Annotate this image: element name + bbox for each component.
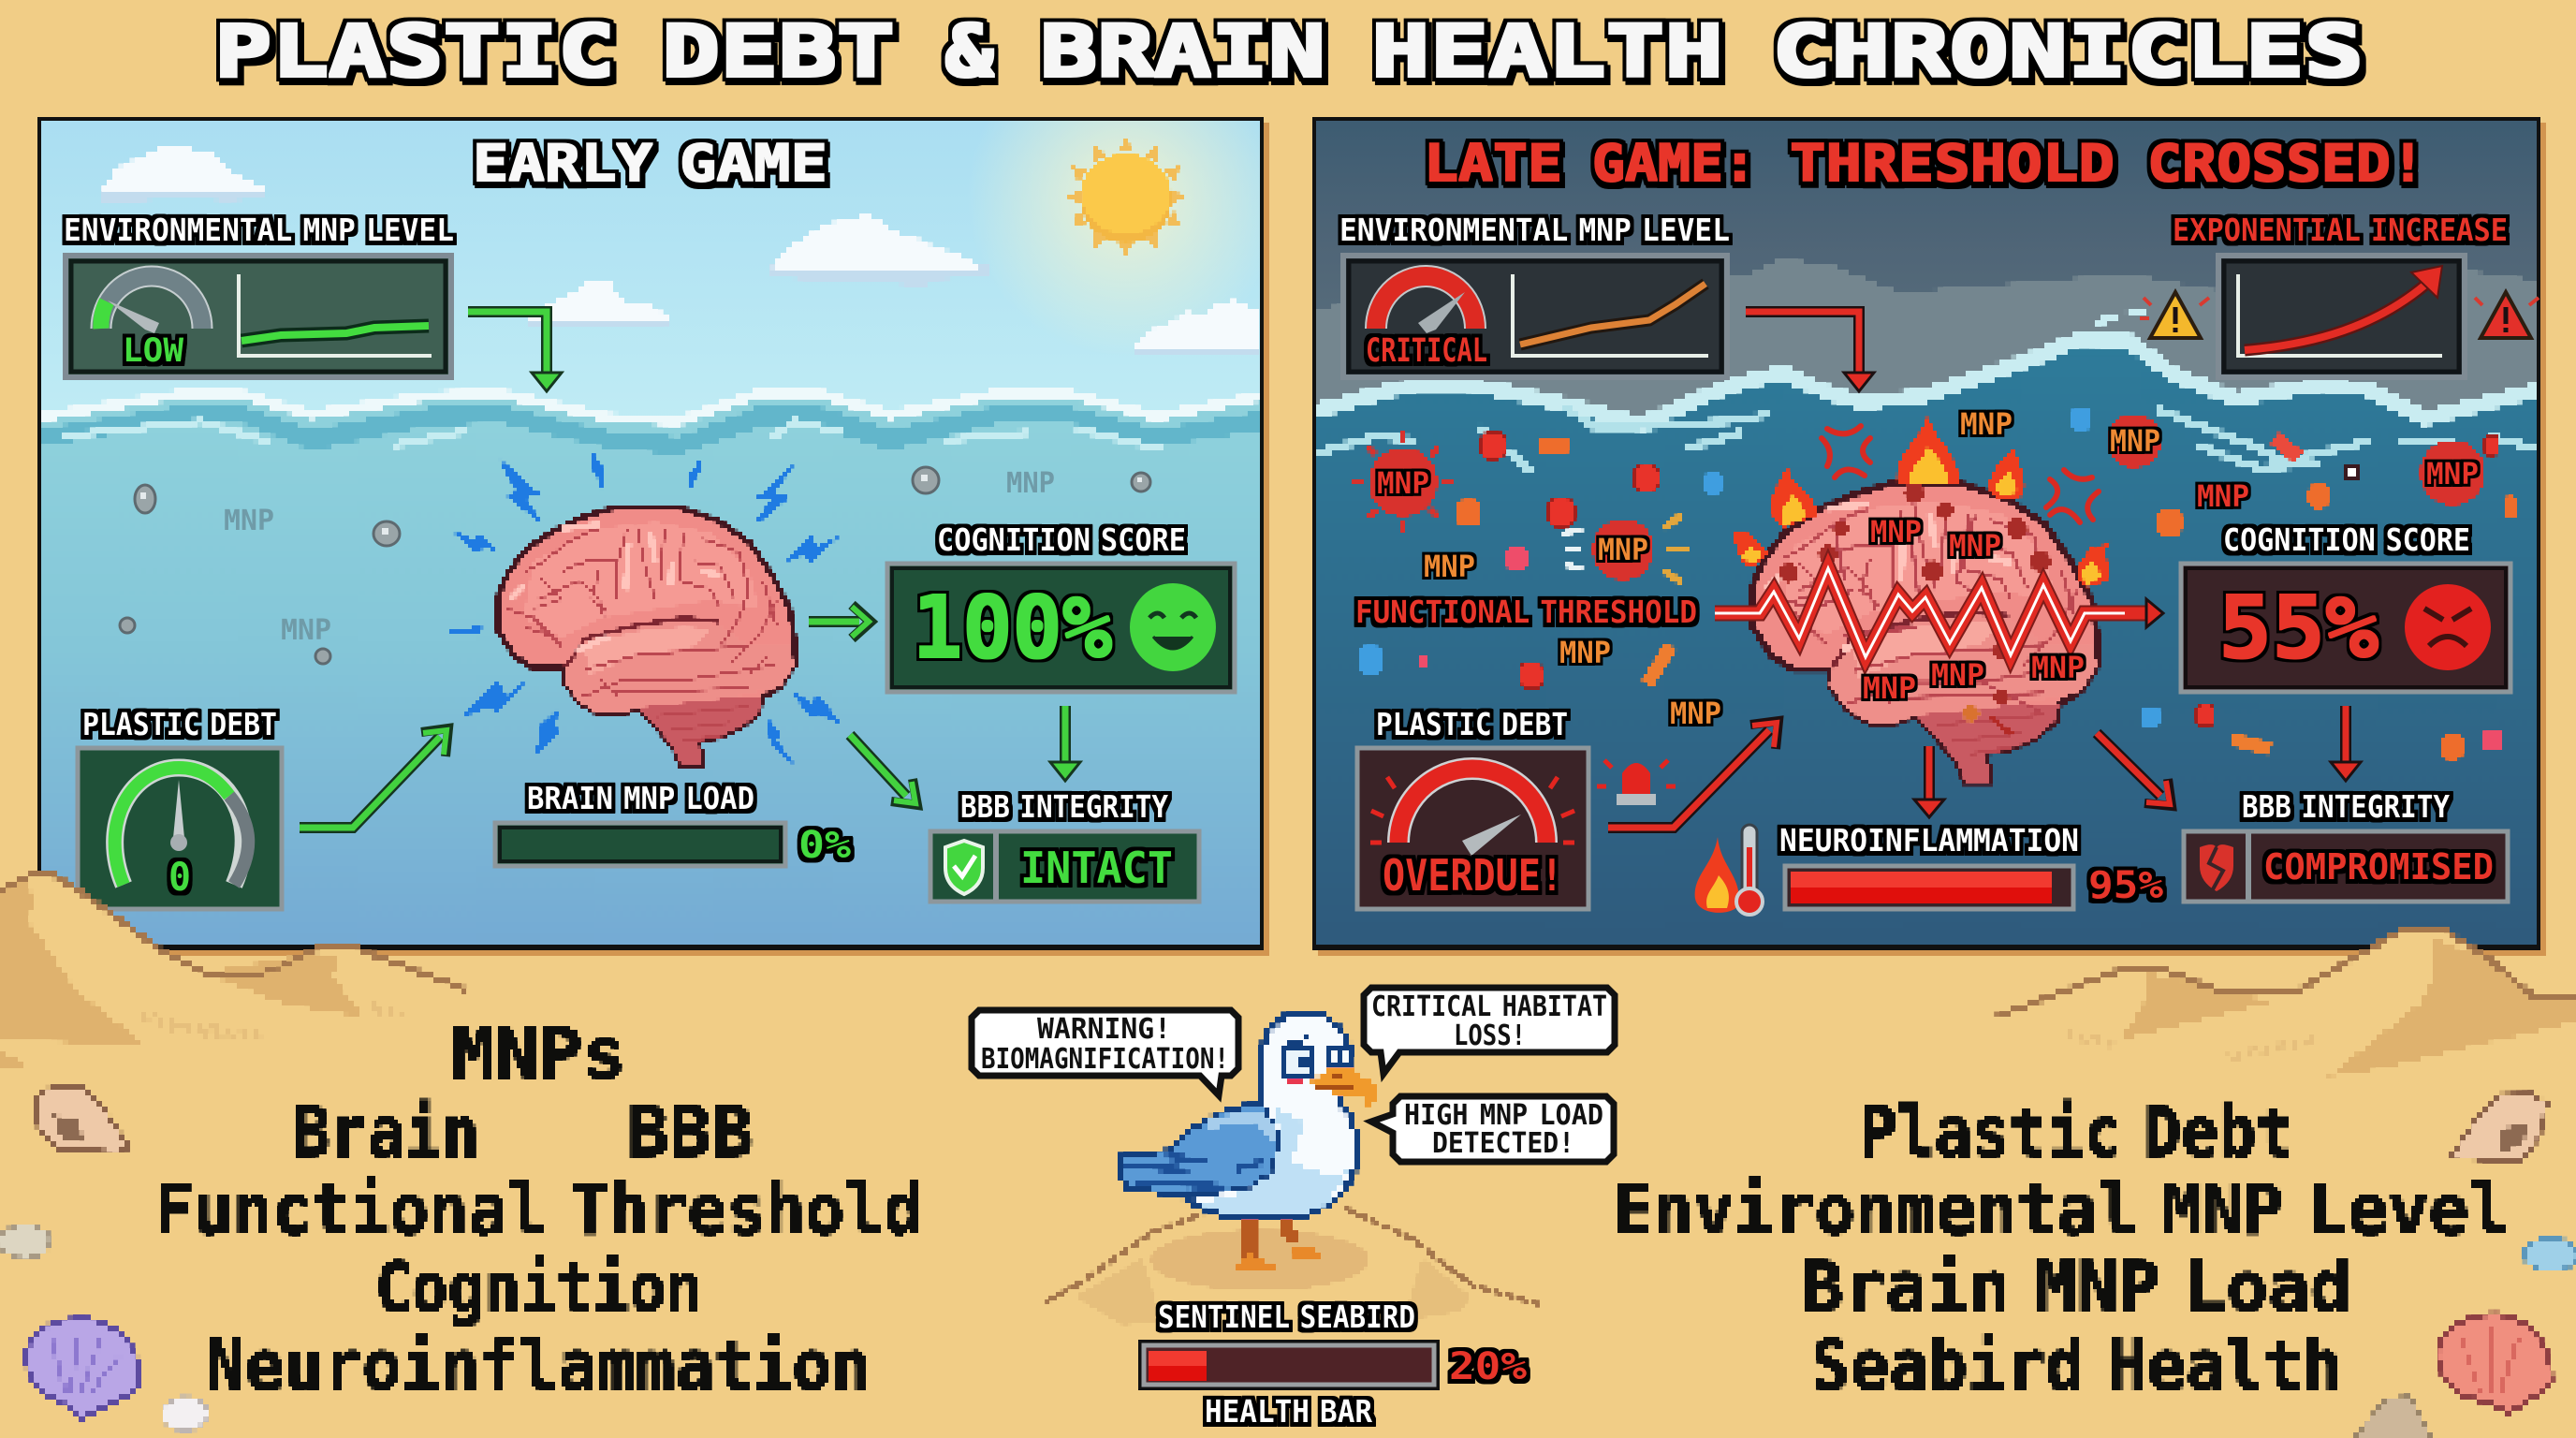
plastic debt gauge bbox=[1357, 706, 1588, 909]
neuroinflammation bar: NEUROINFLAMMATION bbox=[1779, 822, 2079, 858]
arrow: debt to brain bbox=[1608, 721, 1778, 828]
MNP labels: MNP bbox=[1377, 465, 1429, 501]
glossary: left: Functional Threshold bbox=[154, 1170, 923, 1251]
glossary: right: Seabird Health bbox=[1811, 1326, 2342, 1406]
microplastic particles and MNP labels: MNP bbox=[281, 614, 331, 647]
speech bubble: habitat loss: LOSS! bbox=[1454, 1020, 1526, 1052]
MNP labels bbox=[1377, 406, 2479, 731]
brain MNP load bar bbox=[495, 780, 851, 867]
sun bbox=[1068, 139, 1184, 255]
seabird on sand mound bbox=[1046, 1014, 1539, 1325]
cognition score bbox=[2181, 521, 2510, 692]
icon: smiley bbox=[1130, 583, 1216, 671]
dunes: right bbox=[1997, 928, 2576, 1086]
icon: flame and thermometer bbox=[1695, 825, 1763, 915]
label: exponential increase: EXPONENTIAL INCREASE bbox=[2173, 212, 2508, 248]
arrow: brain to neuroinflammation bbox=[1914, 746, 1944, 817]
clouds bbox=[104, 144, 1260, 356]
arrow: environment to ocean bbox=[1746, 312, 1874, 391]
glossary: left: Cognition bbox=[375, 1248, 702, 1328]
icon: healthy brain bbox=[499, 507, 794, 765]
MNP labels in brain: MNP bbox=[2031, 650, 2085, 685]
shells: left bbox=[1, 1086, 208, 1430]
icon: seabird bbox=[1120, 1014, 1378, 1269]
heading: late game: LATE bbox=[1424, 134, 1562, 193]
BBB integrity: BBB INTEGRITY bbox=[960, 788, 1168, 825]
title: DEBT bbox=[662, 9, 895, 93]
glossary: right bbox=[1613, 1093, 2510, 1406]
speech bubble: biomagnification: WARNING! bbox=[1037, 1013, 1171, 1046]
glossary: right: Environmental MNP Level bbox=[1613, 1170, 2510, 1251]
threshold line bbox=[1715, 568, 2163, 657]
microplastic particles and MNP labels: MNP bbox=[224, 505, 274, 537]
cognition score bbox=[887, 521, 1235, 692]
speech bubble: high load: HIGH MNP LOAD bbox=[1404, 1099, 1603, 1132]
late brain with threshold line bbox=[1715, 415, 2163, 782]
panel: late game bbox=[1312, 117, 2546, 956]
speech bubble: high load: DETECTED! bbox=[1432, 1127, 1574, 1160]
heading: late game bbox=[1424, 134, 2425, 193]
arrow: cognition to BBB bbox=[1050, 706, 1080, 781]
cognition score: COGNITION SCORE bbox=[937, 521, 1186, 558]
label: functional threshold: FUNCTIONAL THRESHOLD bbox=[1355, 594, 1697, 630]
storm clouds bbox=[1316, 259, 2537, 431]
MNP labels: MNP bbox=[1559, 635, 1611, 670]
early brain with lightning bbox=[451, 452, 840, 765]
MNP labels: MNP bbox=[1670, 696, 1721, 731]
heading: late game: CROSSED! bbox=[2147, 134, 2425, 193]
plastic particles bbox=[1354, 409, 2516, 759]
seabird health bar: 20% bbox=[1449, 1345, 1527, 1388]
MNP labels: MNP bbox=[1598, 532, 1648, 567]
ocean bbox=[37, 393, 1264, 946]
icon: lightning bolts bbox=[451, 452, 840, 763]
environmental MNP gauge and chart bbox=[1343, 256, 1727, 377]
MNP labels: MNP bbox=[1424, 549, 1475, 584]
glossary: left: Brain bbox=[293, 1093, 479, 1173]
seabird health bar: SENTINEL SEABIRD bbox=[1158, 1299, 1415, 1335]
BBB integrity: INTACT bbox=[1020, 843, 1173, 893]
cognition score: 100% bbox=[913, 578, 1112, 678]
BBB integrity bbox=[930, 788, 1199, 902]
environmental MNP gauge and chart: LOW bbox=[123, 332, 184, 370]
speech bubble: habitat loss: CRITICAL HABITAT bbox=[1371, 990, 1607, 1023]
plastic debt gauge: PLASTIC DEBT bbox=[1376, 706, 1568, 742]
title: PLASTIC bbox=[214, 9, 615, 93]
title: BRAIN bbox=[1040, 9, 1325, 93]
speech bubble: biomagnification bbox=[972, 1010, 1238, 1095]
speech bubble: biomagnification: BIOMAGNIFICATION! bbox=[981, 1043, 1229, 1076]
label: environmental MNP level: ENVIRONMENTAL MNP LEVEL bbox=[1339, 212, 1730, 248]
MNP labels in brain: MNP bbox=[1931, 657, 1984, 693]
arrow: brain to cognition bbox=[809, 605, 871, 638]
neuroinflammation bar bbox=[1695, 822, 2163, 915]
speech bubble: high load bbox=[1371, 1096, 1614, 1162]
icon: angry face bbox=[2405, 584, 2491, 670]
dunes: left bbox=[0, 876, 487, 1067]
panel: early game bbox=[37, 37, 1285, 956]
heading: early game: GAME bbox=[680, 134, 827, 193]
arrow: environment to ocean bbox=[468, 312, 562, 391]
MNP labels: MNP bbox=[1960, 406, 2012, 442]
brain MNP load bar: 0% bbox=[798, 824, 851, 867]
plastic debt gauge: OVERDUE! bbox=[1383, 850, 1563, 901]
icon: inflamed brain bbox=[1753, 483, 2097, 782]
environmental MNP gauge and chart: CRITICAL bbox=[1366, 332, 1487, 370]
plastic debt gauge: 0 bbox=[168, 854, 191, 900]
title: CHRONICLES bbox=[1772, 9, 2364, 93]
neuroinflammation bar: 95% bbox=[2088, 864, 2163, 907]
glossary: left: BBB bbox=[627, 1093, 754, 1173]
title: & bbox=[945, 9, 993, 93]
arrow: debt to brain bbox=[300, 728, 448, 828]
cognition score: COGNITION SCORE bbox=[2223, 521, 2470, 558]
icon: green shield bbox=[945, 841, 983, 894]
icon: warning triangles bbox=[2140, 292, 2539, 338]
MNP labels in brain: MNP bbox=[1870, 514, 1922, 550]
arrow: cognition to BBB bbox=[2331, 706, 2361, 781]
title: HEALTH bbox=[1371, 9, 1723, 93]
plastic debt gauge: PLASTIC DEBT bbox=[82, 706, 277, 742]
seabird health bar: HEALTH BAR bbox=[1205, 1393, 1372, 1430]
icon: anger marks bbox=[1822, 426, 2099, 522]
MNP labels: MNP bbox=[2110, 423, 2160, 459]
speech bubble: habitat loss bbox=[1364, 988, 1615, 1074]
shells: right bbox=[2354, 1094, 2576, 1438]
MNP labels: MNP bbox=[2197, 478, 2249, 514]
glossary: left: Neuroinflammation bbox=[206, 1326, 871, 1406]
heading: late game: THRESHOLD bbox=[1790, 134, 2115, 193]
heading: late game: GAME: bbox=[1592, 134, 1756, 193]
environmental MNP gauge and chart bbox=[66, 256, 451, 377]
label: environmental MNP level: ENVIRONMENTAL MNP LEVEL bbox=[64, 212, 454, 248]
microplastic particles and MNP labels bbox=[120, 467, 1150, 664]
arrow: brain to BBB bbox=[850, 735, 917, 805]
MNP labels: MNP bbox=[2426, 456, 2479, 492]
icon: siren bbox=[1597, 760, 1676, 805]
MNP labels in brain bbox=[1863, 514, 2085, 706]
seabird health bar bbox=[1141, 1299, 1527, 1430]
plastic debt gauge bbox=[78, 706, 282, 909]
arrow: brain to BBB bbox=[2097, 733, 2172, 806]
heading: early game bbox=[473, 134, 827, 193]
cognition score: 55% bbox=[2218, 578, 2378, 678]
BBB integrity: COMPROMISED bbox=[2263, 846, 2494, 888]
red MNP blobs bbox=[1369, 415, 2484, 580]
brain MNP load bar: BRAIN MNP LOAD bbox=[527, 780, 754, 816]
BBB integrity: BBB INTEGRITY bbox=[2242, 788, 2450, 825]
glossary: left: MNPs bbox=[451, 1014, 626, 1094]
stormy ocean bbox=[1312, 309, 2540, 946]
glossary: right: Brain MNP Load bbox=[1802, 1247, 2351, 1328]
MNP labels in brain: MNP bbox=[1863, 670, 1916, 706]
glossary: left bbox=[154, 1014, 923, 1406]
title bbox=[214, 9, 2364, 93]
MNP labels in brain: MNP bbox=[1949, 528, 2001, 564]
glossary: right: Plastic Debt bbox=[1860, 1093, 2293, 1173]
flames bbox=[1732, 415, 2113, 587]
BBB integrity bbox=[2184, 788, 2508, 902]
sand mound bbox=[1046, 1209, 1539, 1325]
icon: broken heart shield bbox=[2200, 844, 2233, 891]
heading: early game: EARLY bbox=[473, 134, 653, 193]
exponential chart bbox=[2218, 256, 2465, 377]
microplastic particles and MNP labels: MNP bbox=[1006, 467, 1055, 500]
